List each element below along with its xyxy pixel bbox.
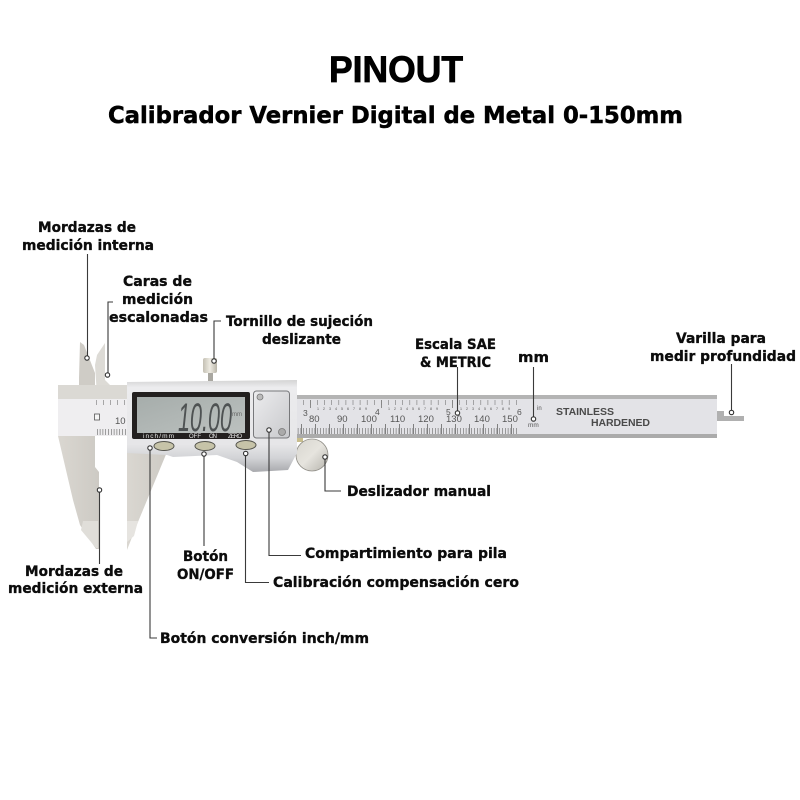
callout: mordazas internas: Mordazas de [38, 220, 136, 236]
callout: caras escalonadas: medición [122, 292, 193, 308]
rulers and scale marks: 90 [337, 414, 348, 425]
callout: deslizador: Deslizador manual [347, 484, 491, 500]
slider body [127, 380, 297, 472]
callout: tornillo [212, 314, 373, 363]
callout: mordazas externas: Mordazas de [25, 564, 123, 580]
rulers and scale marks: mm [528, 422, 539, 429]
rulers and scale marks: 140 [474, 414, 490, 425]
LCD display: inch/mm [143, 433, 174, 440]
LCD display: OFF [189, 434, 201, 440]
callout: calibracion: Calibración compensación cero [273, 575, 519, 591]
LCD display [132, 392, 250, 440]
callout: caras escalonadas [105, 274, 208, 377]
rulers and scale marks: 3 [303, 408, 308, 418]
callout: mordazas externas: medición externa [8, 581, 143, 597]
thumb wheel [293, 438, 328, 471]
fixed head [58, 385, 128, 400]
callout: mordazas internas [22, 220, 154, 360]
rulers and scale marks: 1 2 3 4 5 6 7 8 9 [317, 407, 367, 411]
callout: boton on/off: ON/OFF [177, 567, 234, 583]
callout: mordazas externas [8, 488, 143, 597]
callout: tornillo: deslizante [262, 332, 341, 348]
rulers and scale marks: 1 2 3 4 5 6 7 8 9 [388, 407, 438, 411]
LCD display: 10.00 [178, 396, 232, 440]
callout: boton inch/mm [148, 446, 369, 647]
LCD display: ZERO [228, 434, 242, 440]
callout: varilla: medir profundidad [650, 349, 796, 365]
main beam [58, 395, 717, 438]
rulers and scale marks [94, 402, 542, 432]
rulers and scale marks: 100 [361, 414, 377, 425]
callout: boton on/off [177, 452, 234, 583]
battery cover [254, 391, 290, 438]
title: PINOUT [329, 49, 463, 90]
callout: mm: mm [518, 350, 549, 366]
rulers and scale marks: 130 [446, 414, 462, 425]
callout: mordazas internas: medición interna [22, 238, 154, 254]
callout: tornillo: Tornillo de sujeción [226, 314, 373, 330]
rulers and scale marks: 150 [502, 414, 518, 425]
rulers and scale marks: 110 [390, 414, 405, 425]
callout: boton inch/mm: Botón conversión inch/mm [160, 631, 369, 647]
callout: caras escalonadas: escalonadas [109, 310, 208, 326]
buttons [154, 440, 256, 450]
subtitle: Calibrador Vernier Digital de Metal 0-150mm [108, 103, 683, 129]
outer measuring jaws [58, 436, 167, 550]
callout: escala [415, 337, 496, 415]
rulers and scale marks: 120 [418, 414, 434, 425]
LCD display: mm [232, 412, 242, 418]
rulers and scale marks: 5 [446, 407, 451, 417]
rulers and scale marks: 6 [517, 407, 522, 417]
rulers and scale marks: 4 [375, 407, 380, 417]
brand text [556, 406, 650, 429]
callout: mm [518, 350, 549, 421]
callout: caras escalonadas: Caras de [123, 274, 192, 290]
brand text: STAINLESS [556, 406, 614, 418]
callout: varilla: Varilla para [676, 331, 766, 347]
callout: boton on/off: Botón [183, 549, 228, 565]
depth rod [717, 411, 744, 421]
locking screw [203, 358, 217, 381]
callout: compartimiento [267, 428, 507, 562]
rulers and scale marks: 10 [115, 416, 126, 427]
callout: varilla [650, 331, 796, 415]
LCD display: ON [209, 434, 217, 440]
callout: escala: Escala SAE [415, 337, 496, 353]
rulers and scale marks: in [537, 406, 542, 412]
digital caliper [58, 342, 744, 550]
rulers and scale marks: 80 [309, 414, 320, 425]
callout: calibracion [244, 451, 519, 591]
callout: escala: & METRIC [420, 355, 491, 371]
rulers and scale marks: 1 2 3 4 5 6 7 8 9 [460, 407, 510, 411]
callout: compartimiento: Compartimiento para pila [305, 546, 507, 562]
brand text: HARDENED [591, 417, 650, 429]
callout: deslizador [323, 455, 491, 500]
internal measuring jaws [79, 342, 126, 396]
